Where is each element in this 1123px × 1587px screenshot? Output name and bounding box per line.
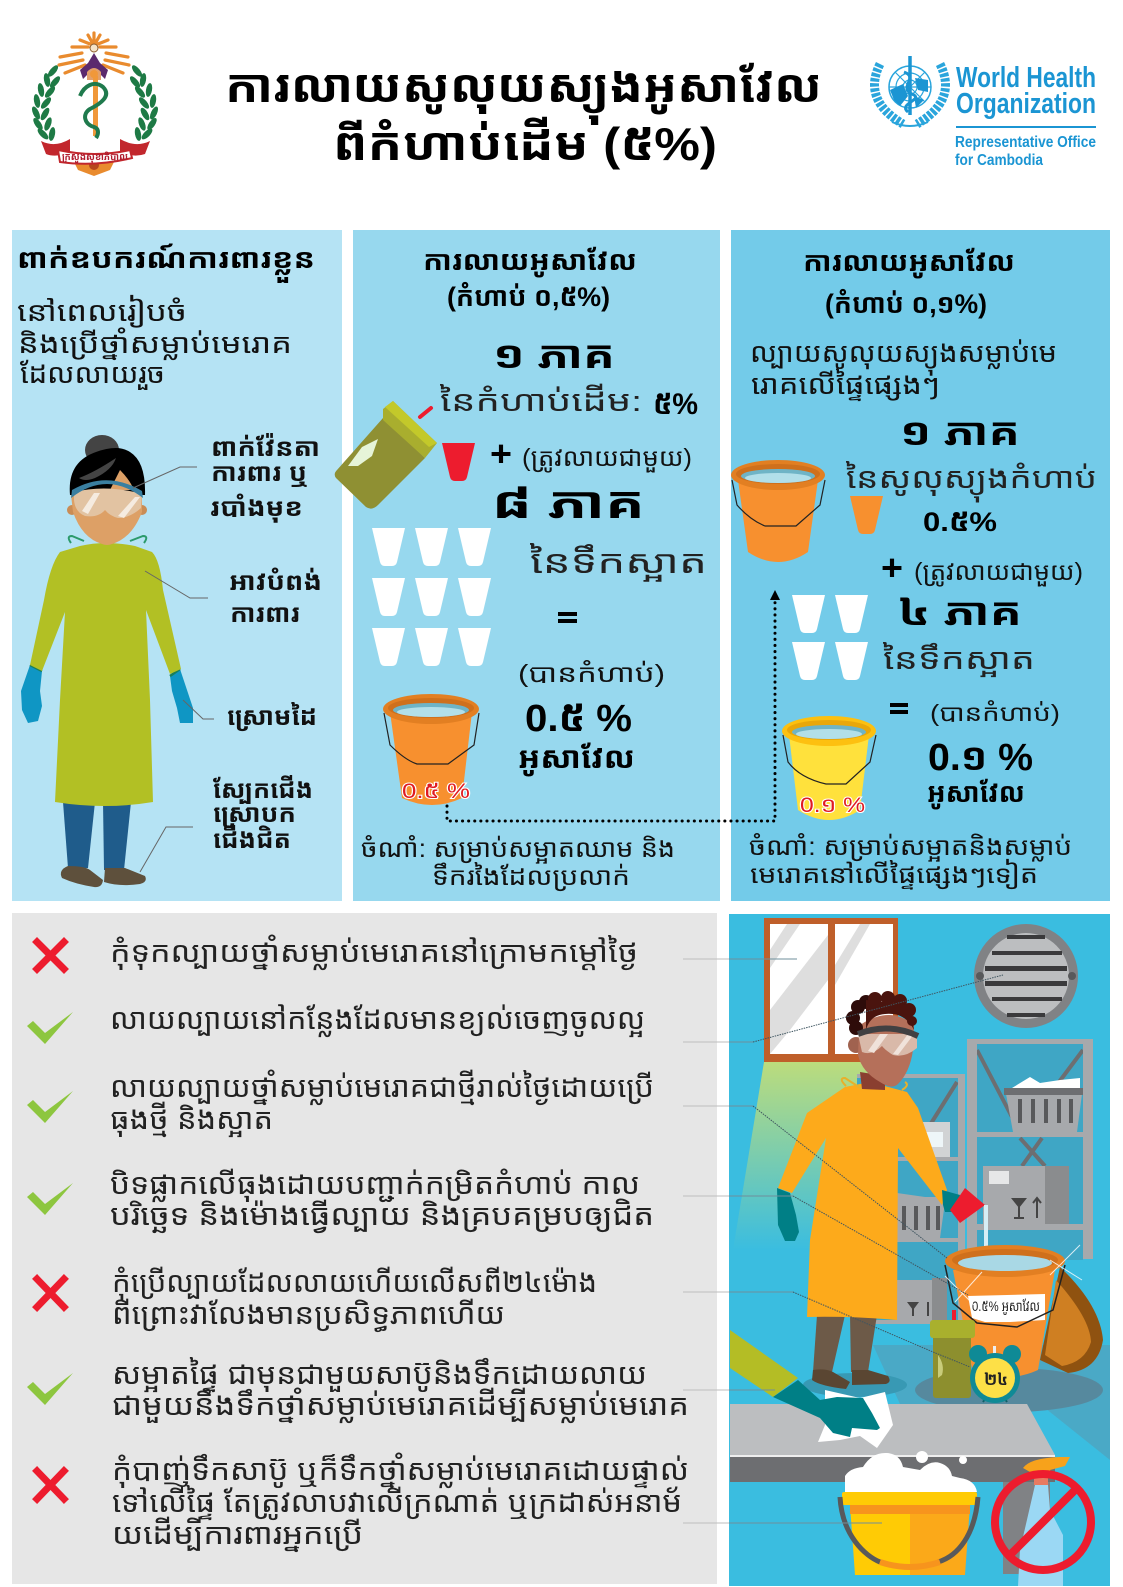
title: ការលាយសូលុយស្យុងអូសាវែល — [225, 60, 822, 125]
icon: WHO emblem — [875, 56, 945, 126]
icon: orange bucket — [731, 460, 825, 562]
label: shoes: ជើងជិត — [213, 823, 291, 854]
icon: red cup — [442, 443, 475, 481]
1 part of 0.5%: ១ ភាគ — [900, 412, 1020, 454]
brown basin — [1040, 1267, 1103, 1373]
panel: 0.1% dilution — [731, 230, 1110, 901]
1 part of stock: ៥% — [653, 388, 698, 421]
icon: orange cup — [850, 496, 883, 534]
intro text: នៅពេលរៀបចំ — [17, 294, 187, 328]
icon: yellow bucket 0.1%: 0.១ % — [800, 794, 865, 817]
panel: protective equipment — [12, 230, 342, 901]
row 1 — [37, 934, 638, 971]
row 3: ធុងថ្មី និងស្អាត — [110, 1101, 273, 1138]
label: shoes — [140, 773, 313, 872]
1 part of stock: នៃកំហាប់ដើម: — [440, 383, 642, 418]
1 part of stock: ១ ភាគ — [493, 335, 615, 377]
icon: orange bucket 0.5% — [383, 694, 479, 805]
footnote: ទឹករងៃដែលប្រលាក់ — [432, 860, 630, 892]
equals sign — [558, 612, 577, 623]
WHO wordmark: Representative Office — [955, 134, 1096, 151]
bucket label — [968, 1294, 1045, 1322]
purpose text: រោគលើផ្ទៃផ្សេងៗ — [751, 368, 940, 402]
icon: chlorine jug pouring — [335, 401, 437, 509]
WHO wordmark — [955, 62, 1096, 169]
icon: four white cups — [792, 595, 868, 680]
floor shadows — [803, 1345, 1110, 1460]
row 6: សម្អាតផ្ទៃ ជាមុនជាមួយសាប៊ូនិងទឹកដោយលាយ — [112, 1357, 647, 1393]
hand wiping with cloth — [730, 1330, 893, 1448]
bucket label: 0.៥% អូសាវែល — [972, 1298, 1040, 1314]
icon: nine white cups — [372, 528, 491, 666]
clean water label: នៃទឹកស្អាត — [883, 642, 1035, 678]
heading — [423, 246, 637, 312]
row 2: លាយល្បាយនៅកន្លែងដែលមានខ្យល់ចេញចូលល្អ — [110, 1004, 645, 1038]
row 5: ពីព្រោះវាលែងមានប្រសិទ្ធភាពហើយ — [112, 1298, 505, 1333]
panel: cleaning room illustration — [729, 914, 1110, 1586]
WHO wordmark: for Cambodia — [955, 152, 1043, 169]
clean water label: នៃទឹកស្អាត — [530, 543, 707, 582]
icon: yellow bucket 0.1% — [782, 716, 876, 820]
row 3 — [27, 1069, 654, 1138]
label: gloves: ស្រោមដៃ — [227, 701, 317, 732]
1 part of 0.5%: 0.៥% — [923, 507, 997, 537]
footnote: មេរោគនៅលើផ្ទៃផ្សេងៗទៀត — [750, 858, 1038, 891]
label: gloves — [183, 700, 317, 732]
label: gown: ការពារ — [230, 600, 300, 628]
plus with water: (ត្រូវលាយជាមួយ) — [522, 444, 692, 474]
row 5 — [37, 1266, 597, 1333]
table — [730, 1404, 1055, 1574]
result concentration: (បានកំហាប់) — [930, 699, 1060, 726]
footnote: ចំណាំ: សម្រាប់សម្អាតនិងសម្លាប់ — [749, 832, 1072, 863]
worker in gown — [777, 991, 985, 1389]
purpose text — [750, 338, 1057, 402]
result concentration — [927, 699, 1060, 810]
1 part of 0.5% — [846, 412, 1097, 537]
row 3: លាយល្បាយថ្នាំសម្លាប់មេរោគជាថ្មីរាល់ថ្ងៃដោយប្រើ — [110, 1069, 654, 1106]
label: goggles: ការពារ ឬ — [211, 459, 308, 487]
row 7: យដើម្បីការពារអ្នកប្រើ — [112, 1516, 363, 1553]
footnote — [749, 832, 1072, 891]
title — [225, 60, 822, 170]
alarm clock — [969, 1345, 1021, 1403]
row 4 — [27, 1168, 654, 1234]
figure: person in protective clothing — [21, 435, 193, 887]
arrow: dotted link from 0.5% bucket to 0.1% step — [447, 590, 780, 821]
result concentration: 0.១ % — [928, 737, 1033, 779]
1 part of 0.5%: នៃសូលុស្យុងកំហាប់ — [846, 461, 1097, 504]
panel heading: ពាក់ឧបករណ៍ការពារខ្លួន — [17, 243, 315, 283]
plus with water: + — [881, 547, 903, 588]
label: gown — [145, 566, 322, 628]
vent — [974, 924, 1078, 1028]
heading: (កំហាប់ ០,១%) — [825, 288, 987, 319]
label: goggles: ពាក់វ៉ែនតា — [211, 433, 320, 462]
plus with water: + — [490, 433, 512, 474]
result concentration: (បានកំហាប់) — [518, 659, 665, 688]
row 6 — [27, 1357, 689, 1424]
label: shoes: ស្បែកជើង — [213, 773, 313, 804]
title: ពីកំហាប់ដើម (៥%) — [333, 116, 717, 170]
plus with water: (ត្រូវលាយជាមួយ) — [914, 558, 1083, 588]
logo: ministry of health crest — [30, 33, 160, 176]
8 parts: ៨ ភាគ — [492, 479, 645, 528]
icon: orange bucket 0.5%: 0.៥ % — [402, 780, 470, 803]
alarm clock: ២៤ — [984, 1369, 1008, 1389]
result concentration: 0.៥ % — [525, 698, 632, 740]
result concentration: អូសាវែល — [518, 742, 635, 777]
plus with water — [490, 433, 692, 474]
label: goggles: របាំងមុខ — [210, 492, 303, 524]
footnote: ចំណាំ: សម្រាប់សម្អាតឈាម និង — [361, 834, 675, 865]
light beam — [733, 1062, 900, 1250]
panel: do and don't list — [12, 913, 717, 1584]
row 2 — [27, 1004, 645, 1044]
intro text — [17, 294, 292, 391]
logo: World Health Organization — [875, 56, 1096, 169]
equals sign — [890, 703, 908, 714]
spray bottle prohibited — [995, 1457, 1091, 1586]
4 parts: ៤ ភាគ — [898, 592, 1022, 634]
1 part of stock — [440, 335, 698, 421]
row 7 — [37, 1452, 689, 1553]
intro text: និងប្រើថ្នាំសម្លាប់មេរោគ — [18, 327, 292, 361]
row 7: ទៅលើផ្ទៃ តែត្រូវលាបវាលើក្រណាត់ ឬក្រដាស់អនាម័ — [112, 1485, 682, 1521]
result concentration — [518, 659, 665, 777]
row 6: ជាមួយនឹងទឹកថ្នាំសម្លាប់មេរោគដើម្បីសម្លាប់មេរោគ — [112, 1387, 689, 1424]
left shelf — [857, 1074, 965, 1324]
logo: ministry of health crest: ក្រសួងសុខាភិបាល — [62, 151, 128, 163]
heading — [803, 247, 1015, 319]
label: gown: អាវបំពង់ — [229, 566, 322, 596]
row 4: បិទផ្លាកលើធុងដោយបញ្ជាក់កម្រិតកំហាប់ កាល — [110, 1168, 640, 1203]
leader lines from list to illustration — [683, 959, 1003, 1523]
row 5: កុំប្រើល្បាយដែលលាយហើយលើសពី២៤ម៉ោង — [112, 1266, 597, 1301]
row 7: កុំបាញ់ទឹកសាប៊ូ ឬក៏ទឹកថ្នាំសម្លាប់មេរោគដោយផ្ទាល់ — [112, 1452, 689, 1489]
plus with water — [881, 547, 1083, 588]
label: shoes: ស្រោបក — [213, 800, 296, 829]
window — [764, 918, 898, 1062]
panel: 0.5% dilution — [335, 230, 720, 901]
row 4: បរិច្ឆេទ និងម៉ោងធ្វើល្បាយ និងគ្របគម្របឲ្យជិត — [110, 1198, 654, 1234]
heading: ការលាយអូសាវែល — [423, 246, 637, 278]
right shelf — [967, 1039, 1093, 1260]
orange bucket with label — [945, 1205, 1082, 1377]
purpose text: ល្បាយសូលុយស្យុងសម្លាប់មេ — [750, 338, 1057, 376]
small jug — [930, 1310, 975, 1398]
yellow bucket with foam — [840, 1451, 978, 1575]
intro text: ដែលលាយរួច — [20, 359, 165, 391]
heading: ការលាយអូសាវែល — [803, 247, 1015, 279]
footnote — [361, 834, 675, 892]
row 1: កុំទុកល្បាយថ្នាំសម្លាប់មេរោគនៅក្រោមកម្ដៅថ្ងៃ — [110, 934, 638, 971]
heading: (កំហាប់ ០,៥%) — [447, 281, 610, 312]
label: goggles — [133, 433, 320, 524]
result concentration: អូសាវែល — [927, 778, 1025, 810]
